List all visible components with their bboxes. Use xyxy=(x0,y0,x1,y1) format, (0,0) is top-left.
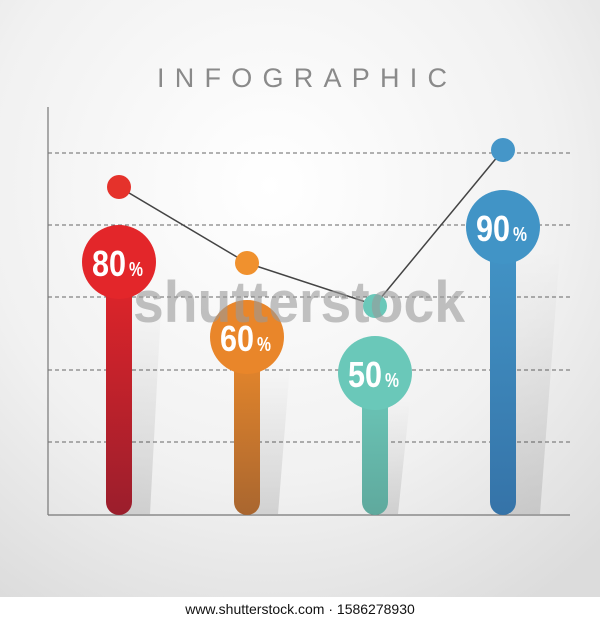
bar: 50%: % xyxy=(385,370,399,392)
bar: 90% xyxy=(466,138,540,515)
bar: 60% xyxy=(210,251,284,515)
grid lines xyxy=(48,153,570,442)
footer xyxy=(0,597,600,620)
title: INFOGRAPHIC xyxy=(157,63,447,93)
bar: 60%: 60 xyxy=(220,318,254,359)
bar: 80% xyxy=(82,175,156,515)
bar: 80%: % xyxy=(129,259,143,281)
watermark: shutterstock xyxy=(133,270,466,335)
bar: 50%: 50 xyxy=(348,354,382,395)
bar: 80%: 80 xyxy=(92,243,126,284)
bar: 90%: % xyxy=(513,224,527,246)
bar: 50% xyxy=(338,294,412,515)
axes xyxy=(48,107,570,515)
line connecting dots xyxy=(119,150,503,305)
shadows xyxy=(120,250,560,514)
bar: 60%: % xyxy=(257,334,271,356)
bar: 90%: 90 xyxy=(476,208,510,249)
footer: www.shutterstock.com · 1586278930 xyxy=(184,601,415,617)
